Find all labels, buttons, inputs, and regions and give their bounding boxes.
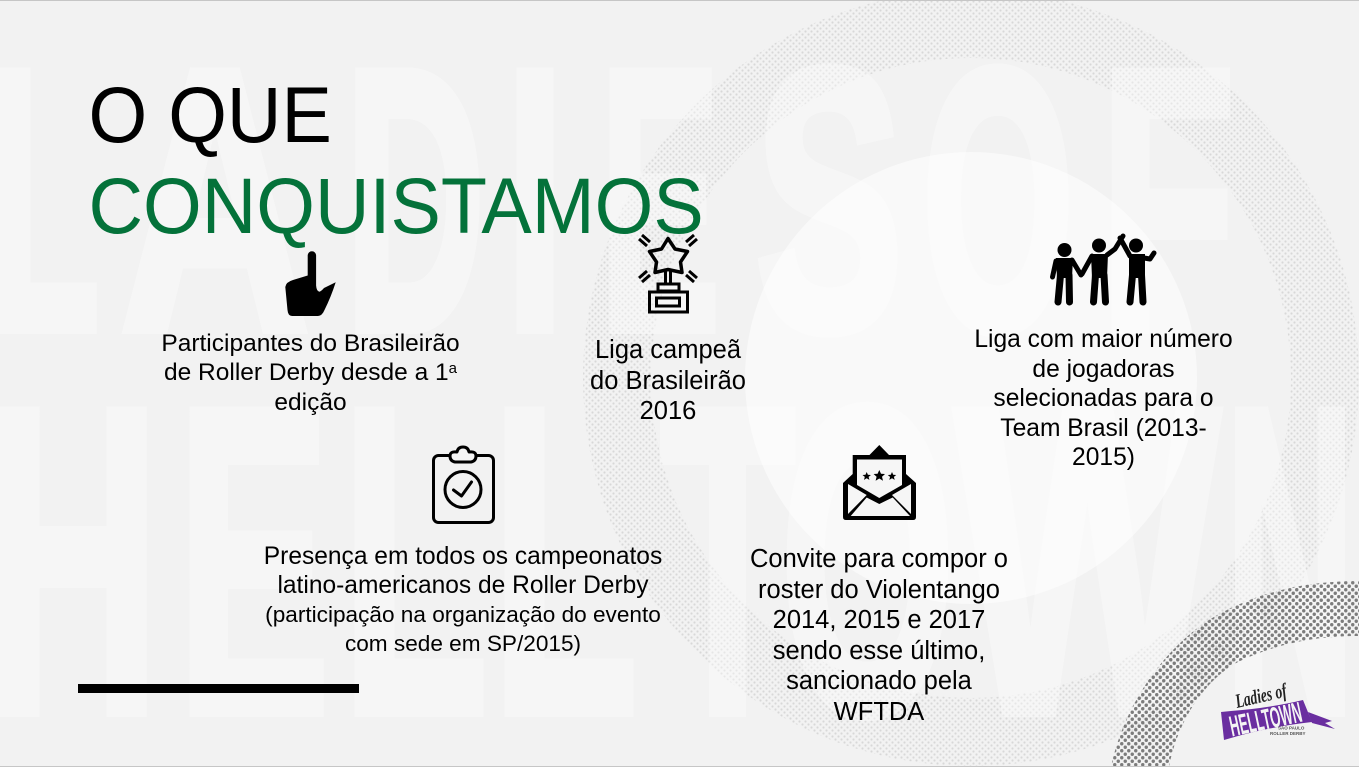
icon: three people [1052,236,1154,302]
title: first line: O QUE [88,72,332,159]
text: presença em campeonatos: Presença em todos os campeonatos [264,543,662,570]
background: white circle [745,152,1197,604]
text: liga campeã: 2016 [640,397,696,425]
icon: pointing hand [285,251,336,316]
background: giant faint letters: S [755,0,903,409]
text: liga campeã: Liga campeã [595,336,741,364]
text: liga campeã [590,336,746,425]
text: convite violentango: sancionado pela [786,667,972,695]
text: convite violentango [750,545,1008,726]
text: participantes: de Roller Derby desde a 1a [164,359,457,386]
icon: clipboard with check [434,447,494,522]
background: giant faint letters: A [120,0,310,409]
icon: open envelope with stars [843,445,916,520]
text: convite violentango: Convite para compor o [750,545,1008,573]
text: maior número de jogadoras: de jogadoras [1032,356,1175,382]
text: maior número de jogadoras: Team Brasil (2013- [1000,414,1207,442]
text: maior número de jogadoras: selecionadas para o [993,385,1214,412]
text: presença em campeonatos: com sede em SP/2015) [345,631,581,656]
background: giant faint letters: F [1100,0,1235,409]
logo: Ladies of Helltown: SÃO PAULO [1278,724,1305,730]
background: giant faint letters: O [922,0,1074,409]
text: participantes: edição [274,389,347,416]
icon: star trophy [639,235,697,312]
top edge line [0,0,1359,1]
text: convite violentango: 2014, 2015 e 2017 [773,606,985,634]
background: large halftone ring [583,0,1359,766]
logo: Ladies of Helltown: Ladies of [1233,679,1290,713]
logo: Ladies of Helltown: ROLLER DERBY [1270,731,1306,736]
text: maior número de jogadoras: 2015) [1072,444,1135,471]
text: maior número de jogadoras: Liga com maior número [974,326,1233,353]
text: presença em campeonatos: (participação na organização do evento [265,602,661,627]
text: convite violentango: roster do Violentango [758,576,1000,604]
text: participantes [161,330,460,416]
text: participantes: Participantes do Brasileirão [161,330,460,357]
title: second line in green: CONQUISTAMOS [88,163,704,250]
background: giant faint letters: D [345,0,485,409]
background: giant faint letters: E [600,0,720,409]
text: convite violentango: sendo esse último, [773,636,985,664]
background: giant faint letters: I [505,0,565,409]
text: maior número de jogadoras [974,326,1233,471]
bottom edge line [0,766,1359,767]
black accent bar [78,684,359,693]
text: liga campeã: do Brasileirão [590,366,746,394]
background: dark halftone ring [1111,581,1359,767]
text: convite violentango: WFTDA [834,698,924,726]
text: presença em campeonatos [264,543,662,656]
text: presença em campeonatos: latino-americanos de Roller Derby [277,572,649,599]
